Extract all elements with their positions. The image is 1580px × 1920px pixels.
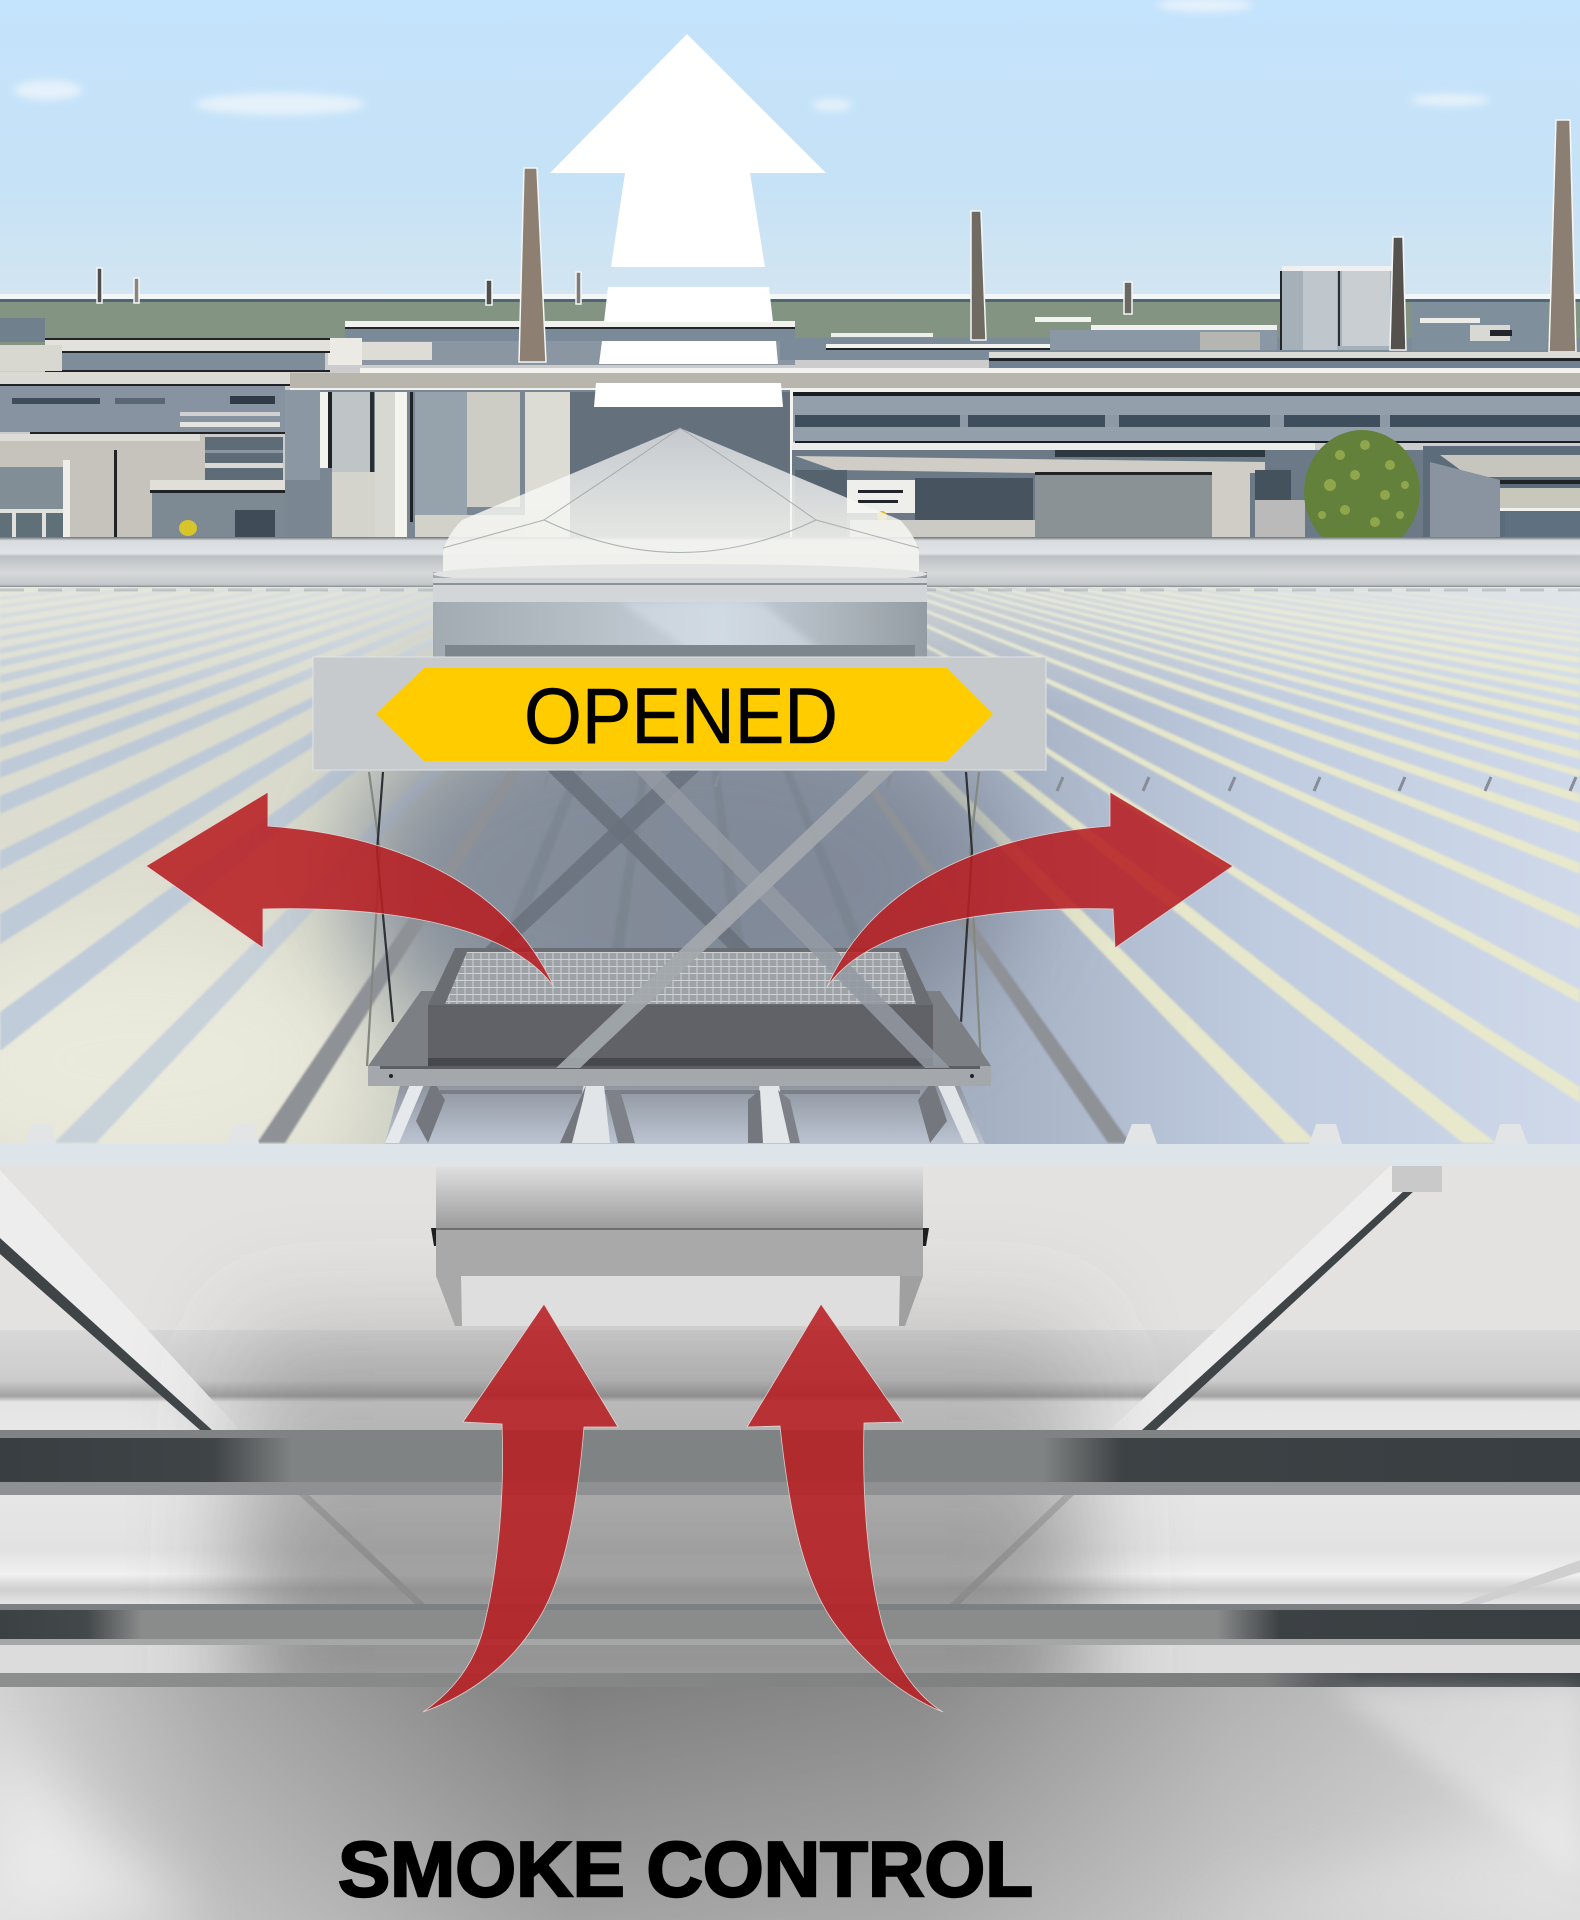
back buildings right: [780, 302, 1580, 360]
support plate: [368, 991, 991, 1086]
ceiling duct: [431, 1167, 929, 1326]
near left rib: [56, 770, 442, 1144]
lower right block: [792, 443, 1580, 540]
struts in front of the box: [556, 770, 950, 1068]
ridge serrations at eave: [0, 588, 1580, 592]
left diagonal purlin: [0, 1170, 425, 1604]
ribs on right side: [926, 587, 1580, 1144]
far right building: [1423, 446, 1580, 538]
sky background: [0, 0, 1580, 300]
metal ribs near the centre: [258, 770, 1127, 1144]
ridge ticks: [714, 775, 1578, 792]
bottom rib tabs: [24, 1124, 1528, 1144]
shadow around vent: [302, 770, 1050, 1042]
red arrow: roof left: [146, 792, 554, 987]
chimneys: [97, 120, 1576, 362]
red arrow: ceiling right: [747, 1304, 943, 1712]
bright wash, lower left: [0, 940, 372, 1144]
tree: [1304, 430, 1420, 537]
red arrow: ceiling left: [423, 1304, 618, 1712]
struts behind the box: [485, 770, 750, 948]
roof with perspective ribs: [0, 587, 1580, 1144]
under-roof channels: [385, 1075, 985, 1144]
parapet band: [0, 537, 1580, 588]
storage tanks: [1280, 266, 1398, 350]
steel beam 1: [0, 1430, 1580, 1495]
status label: OPENED: [524, 671, 838, 760]
title: SMOKE CONTROL: [338, 1825, 1033, 1913]
steel beam 2: [0, 1604, 1580, 1645]
central dark haze: [240, 1290, 1080, 1730]
yellow status sign: [376, 668, 993, 761]
rooflight dome: [443, 428, 919, 572]
suspension wires: [367, 772, 981, 1066]
roof top haze: [0, 587, 1580, 682]
white exhaust arrow: [550, 34, 826, 407]
ribs on left side: [0, 587, 433, 1051]
status panel: [313, 657, 1046, 770]
left foreground building: [0, 434, 325, 538]
skyline: factory buildings: [0, 120, 1580, 554]
vent curb: [433, 564, 927, 659]
horizon and forest: [0, 294, 1580, 352]
smoke damper box with grid: [428, 948, 933, 1066]
eave beam: [0, 1144, 1580, 1167]
glazed wall, left: [0, 372, 290, 434]
glazed wall, right: [785, 392, 1580, 542]
clouds: [14, 0, 1490, 115]
red arrow: roof right: [827, 792, 1233, 987]
long roof, right: [290, 352, 1580, 396]
steel beam 3: [0, 1673, 1580, 1687]
floor haze background: [0, 1687, 1580, 1920]
silos: [285, 390, 790, 538]
right diagonal purlin: [950, 1166, 1580, 1604]
back buildings left: [0, 318, 795, 372]
ceiling: [0, 1166, 1580, 1673]
